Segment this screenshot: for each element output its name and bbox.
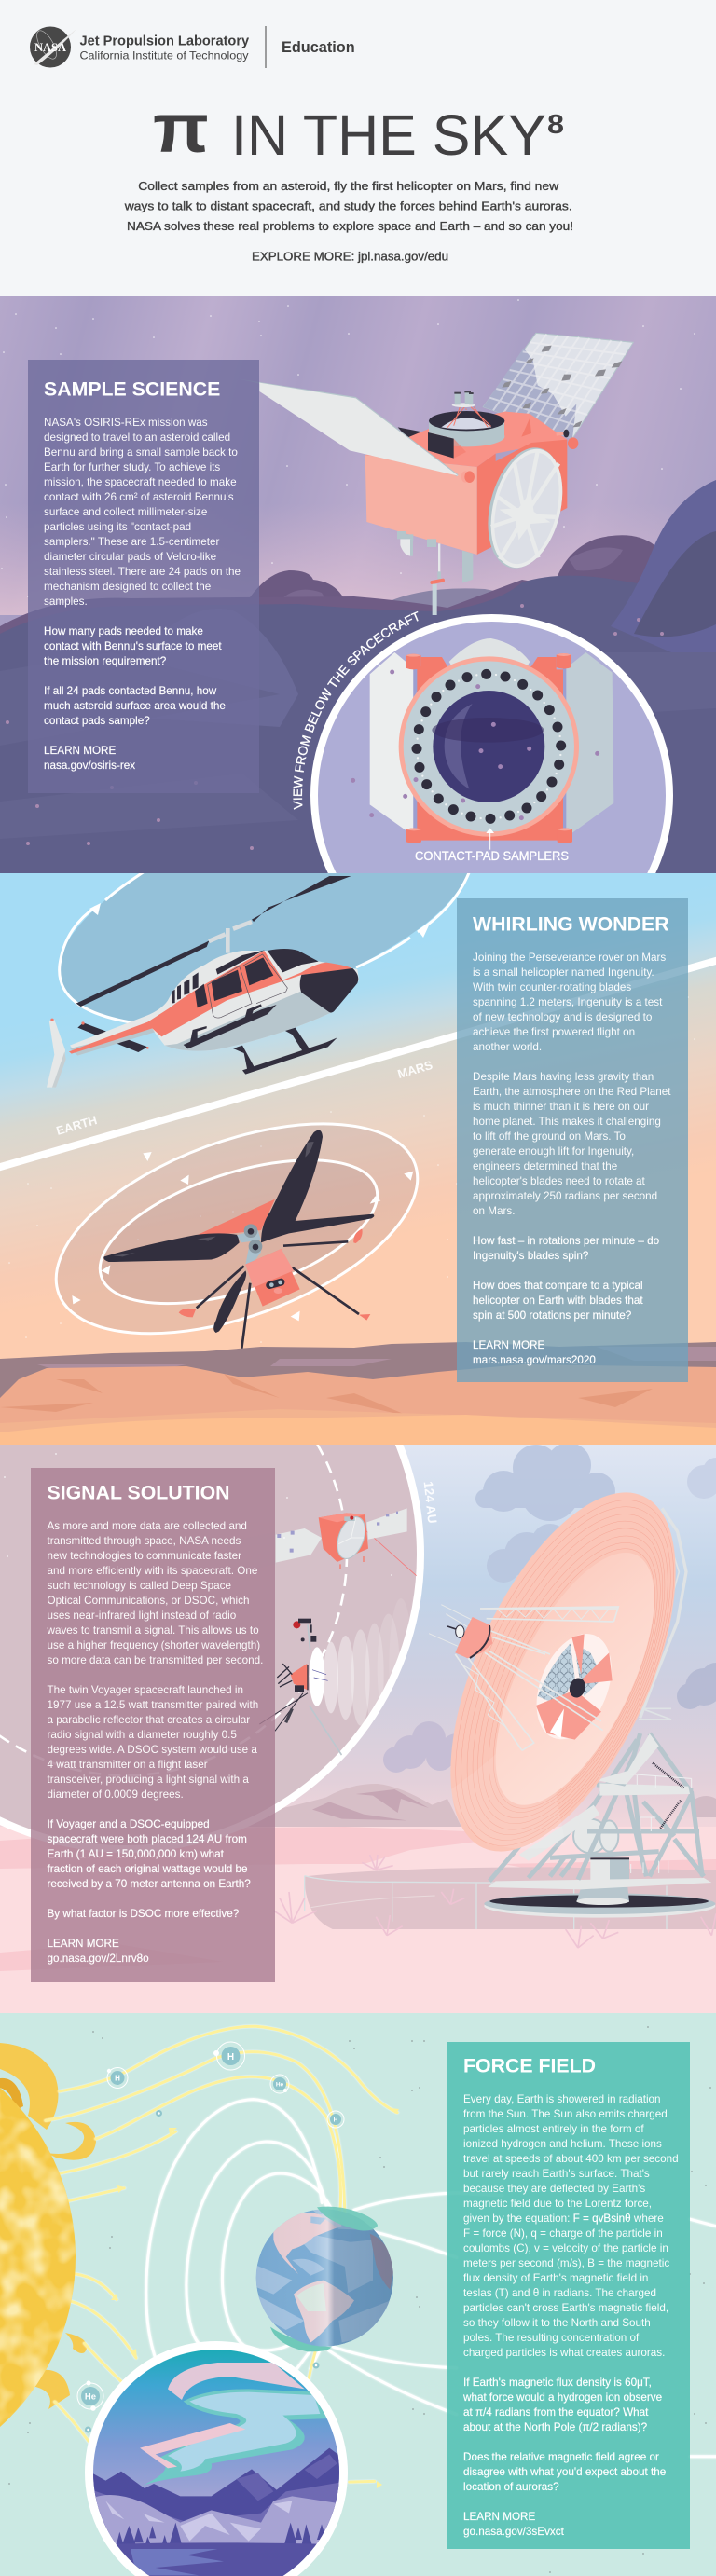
body text: F = force (N), q = charge of the particle in: [463, 2227, 663, 2240]
icon: NASA meatball logo: NASA: [34, 41, 66, 54]
particles: [88, 2114, 316, 2430]
header logos: [30, 26, 355, 68]
outer reflector: [404, 1460, 716, 1884]
shrubs: [273, 1855, 716, 1948]
body text: waves to transmit a signal. This allows us to: [47, 1624, 259, 1637]
body text: transceiver, producing a light signal with a: [47, 1774, 249, 1786]
DSOC spacecraft: [227, 1508, 407, 1575]
north aurora: [317, 2207, 378, 2231]
intro text: NASA solves these real problems to explore space and Earth – and so can you!: [127, 219, 573, 233]
rotor disc: earth helicopter: [60, 870, 470, 1024]
text panel: whirling wonder: [457, 898, 688, 1382]
header background: [0, 0, 716, 296]
far hills: [392, 588, 493, 608]
sun flares: [0, 2043, 96, 2409]
body text: stainless steel. There are 24 pads on the: [44, 566, 241, 578]
body text: samplers." These are 1.5-centimeter: [44, 536, 220, 548]
aperture: [433, 691, 544, 802]
heading: FORCE FIELD: [463, 2054, 596, 2076]
reflector rings: [410, 1469, 716, 1877]
body text: contact with 26 cm² of asteroid Bennu's: [44, 491, 234, 503]
institute name: California Institute of Technology: [80, 48, 249, 62]
aurora view circle: [90, 2345, 345, 2576]
heat shield dish: [488, 447, 563, 569]
deck: [488, 1878, 711, 1889]
questions: go.nasa.gov/3sEvxct: [463, 2526, 565, 2538]
subreflector: [448, 1617, 492, 1658]
label: mars: MARS: [396, 1058, 434, 1081]
hills: [177, 1784, 716, 1829]
label: earth: EARTH: [55, 1113, 99, 1138]
questions: about at the North Pole (π/2 radians)?: [463, 2421, 648, 2433]
body text: radio signal with a diameter roughly 0.5: [47, 1729, 237, 1741]
ion: H small: H: [334, 2117, 338, 2123]
ridge line: [0, 580, 528, 634]
questions: How many pads needed to make: [44, 625, 203, 637]
central feed: [522, 1623, 626, 1750]
body text: poles. The resulting concentration of: [463, 2332, 640, 2344]
body text: generate enough lift for Ingenuity,: [473, 1145, 634, 1158]
body text: from the Sun. The Sun also emits charged: [463, 2108, 668, 2120]
body text: designed to travel to an asteroid called: [44, 432, 230, 444]
lab name: Jet Propulsion Laboratory: [80, 34, 250, 48]
red stripe: [69, 951, 352, 1054]
far mountains: [91, 2448, 342, 2547]
body text: to lift off the ground on Mars. To: [473, 1130, 626, 1143]
body text: use a higher frequency (shorter wavelength): [47, 1639, 260, 1651]
magnetic and solar field lines: [46, 2026, 716, 2482]
body text: new technologies to communicate faster: [47, 1550, 241, 1562]
body text: on Mars.: [473, 1205, 515, 1217]
divider line: [0, 958, 716, 1170]
ions: [77, 2042, 344, 2430]
solar panel: [198, 1199, 275, 1235]
body text: charged particles is what creates auroras.: [463, 2347, 665, 2359]
body text: 4 watt transmitter on a flight laser: [47, 1759, 208, 1771]
dome: [449, 638, 530, 665]
rotor hubs: [237, 1224, 262, 1265]
voyager signal beam: [324, 1584, 432, 1733]
ground: [0, 1827, 716, 2013]
label: contact-pad samplers: CONTACT-PAD SAMPLERS: [415, 849, 569, 863]
questions: nasa.gov/osiris-rex: [44, 760, 135, 772]
questions: go.nasa.gov/2Lnrv8o: [47, 1953, 149, 1965]
questions: spacecraft were both placed 124 AU from: [47, 1833, 247, 1845]
callout: view from below circle: [293, 611, 673, 873]
divider: [265, 26, 267, 68]
questions: contact with Bennu's surface to meet: [44, 640, 222, 652]
clouds: [383, 1443, 716, 1773]
ion: He: He: [276, 2082, 284, 2088]
feed lines: [429, 1605, 473, 1647]
mound left: [250, 570, 343, 597]
stars: [5, 1454, 392, 1575]
stars: [9, 2027, 710, 2572]
aurora bands: [140, 2363, 329, 2486]
education label: Education: [282, 39, 355, 56]
icon: NASA meatball logo: [30, 26, 76, 67]
roof glass: [268, 949, 319, 972]
body text: As more and more data are collected and: [47, 1520, 247, 1532]
body text: and more efficiently with its spacecraft. One: [47, 1565, 257, 1577]
body text: uses near-infrared light instead of radio: [47, 1610, 237, 1622]
questions: Earth (1 AU = 150,000,000 km) what: [47, 1848, 225, 1860]
solar wind lines: [46, 2026, 397, 2482]
ground: mars: [0, 1342, 716, 1445]
body text: Optical Communications, or DSOC, which: [47, 1595, 249, 1607]
fuselage: [70, 951, 359, 1056]
heading: WHIRLING WONDER: [473, 913, 669, 936]
red frame: [417, 657, 563, 841]
wheel: [573, 1819, 608, 1853]
south aurora: [270, 2327, 331, 2351]
mast and blades: [76, 876, 351, 1007]
questions: How does that compare to a typical: [473, 1280, 643, 1292]
outer rotor sweep: [29, 1081, 445, 1376]
body text: Bennu and bring a small sample back to: [44, 446, 238, 459]
ion: H: [107, 2067, 128, 2088]
earth: [255, 2207, 394, 2351]
trees: [116, 2523, 326, 2547]
hinge: [461, 471, 475, 483]
label: 124 AU: 124 AU: [421, 1481, 439, 1524]
struts: [455, 1607, 618, 1750]
voyager spacecraft: [259, 1619, 342, 1755]
questions: Does the relative magnetic field agree or: [463, 2451, 659, 2463]
body text: another world.: [473, 1041, 542, 1053]
night sky: [90, 2346, 345, 2576]
inner rotor sweep: [83, 1131, 394, 1333]
dashed orbit: [0, 1334, 347, 1775]
body text: helicopter's blades need to rotate at: [473, 1175, 646, 1187]
sampler ring: [399, 656, 579, 837]
red laser: [351, 1517, 417, 1576]
pedestal: [590, 1859, 611, 1881]
questions: at π/4 radians from the equator? What: [463, 2406, 649, 2418]
sample return capsule: [429, 391, 504, 446]
text panel: signal solution: [31, 1468, 275, 1982]
skids: [184, 1004, 337, 1075]
body text: The twin Voyager spacecraft launched in: [47, 1684, 243, 1696]
title: [153, 89, 564, 167]
side flaps: [370, 652, 413, 836]
questions: much asteroid surface area would the: [44, 700, 226, 712]
blades: [103, 1130, 374, 1333]
body text: diameter of 0.0009 degrees.: [47, 1788, 184, 1801]
deep space dish: [404, 1460, 716, 1884]
arrow to pads: [489, 833, 490, 850]
questions: received by a 70 meter antenna on Earth?: [47, 1878, 251, 1890]
left translucent hill: [259, 630, 298, 727]
questions: contact pads sample?: [44, 715, 150, 727]
body text: NASA's OSIRIS-REx mission was: [44, 417, 208, 429]
body text: degrees wide. A DSOC system would use a: [47, 1744, 257, 1756]
tail rotor: [77, 1021, 149, 1052]
body text: spanning 1.2 meters, Ingenuity is a test: [473, 996, 663, 1008]
ion: He: [270, 2075, 289, 2093]
fence and shadow: [273, 1855, 716, 1948]
body text: mechanism designed to collect the: [44, 581, 211, 593]
body text: of new technology and is designed to: [473, 1011, 653, 1023]
windows and vents: [172, 957, 273, 1007]
questions: If Earth's magnetic flux density is 60μT,: [463, 2377, 652, 2389]
body text: such technology is called Deep Space: [47, 1580, 231, 1592]
body text: so more data can be transmitted per second.: [47, 1654, 263, 1666]
base: [484, 1894, 715, 1918]
sun: [0, 2022, 84, 2488]
body text: Earth, the atmosphere on the Red Planet: [473, 1086, 671, 1098]
sampling arm: [432, 543, 443, 615]
body text: particles can't cross Earth's magnetic field,: [463, 2302, 668, 2314]
mid mountains: [91, 2482, 342, 2547]
speckles: [353, 672, 598, 818]
arrowheads: [111, 2108, 399, 2488]
magnetic field lines: [146, 2100, 716, 2457]
body text: engineers determined that the: [473, 1160, 617, 1172]
inner reflector: [463, 1530, 686, 1828]
body text: particles using its "contact-pad: [44, 521, 191, 533]
body text: teslas (T) and θ in radians. The charged: [463, 2287, 656, 2299]
globe: [255, 2209, 394, 2347]
right hill: [611, 480, 716, 671]
body text: ionized hydrogen and helium. These ions: [463, 2138, 662, 2150]
helicopter: [47, 876, 359, 1088]
sweep arrows: [72, 1152, 413, 1321]
sampler head: [353, 638, 613, 850]
body text: coulombs (C), v = velocity of the particle in: [463, 2242, 668, 2254]
body side: [477, 440, 567, 555]
panel: sample science scene: [0, 296, 716, 873]
questions: LEARN MORE: [47, 1938, 119, 1950]
body text: Despite Mars having less gravity than: [473, 1071, 654, 1083]
legs: [197, 1241, 359, 1367]
body front: [365, 455, 477, 555]
antenna mount: [484, 1733, 715, 1918]
body text: but rarely reach Earth's surface. That's: [463, 2168, 650, 2180]
ion: H small: [327, 2111, 344, 2128]
heading: SAMPLE SCIENCE: [44, 378, 220, 401]
ion: H large: [213, 2042, 244, 2070]
body text: surface and collect millimeter-size: [44, 506, 207, 518]
body text: travel at speeds of about 400 km per second: [463, 2153, 679, 2165]
body text: With twin counter-rotating blades: [473, 981, 631, 993]
rocks: [7, 606, 662, 848]
frame: [489, 1733, 704, 1881]
title: IN THE SKY: [231, 103, 546, 167]
questions: what force would a hydrogen ion observe: [462, 2391, 662, 2404]
white flap: [259, 382, 459, 477]
backing rim: [640, 1508, 686, 1718]
belly: [70, 991, 331, 1056]
near mountains: [93, 2495, 342, 2547]
body text: a parabolic reflector that creates a circular: [47, 1714, 250, 1726]
questions: spin at 500 rotations per minute?: [473, 1309, 632, 1322]
ion: He large: [77, 2380, 103, 2411]
questions: location of auroras?: [463, 2481, 559, 2493]
body text: Earth for further study. To achieve its: [44, 461, 220, 473]
panel: signal solution scene: [0, 1260, 716, 2013]
questions: By what factor is DSOC more effective?: [47, 1908, 240, 1920]
title: π: [153, 89, 209, 167]
text panel: sample science: [28, 360, 259, 793]
stars: [9, 997, 695, 1351]
body text: transmitted through space, NASA needs: [47, 1535, 241, 1547]
intro text: Collect samples from an asteroid, fly the first helicopter on Mars, find new: [138, 179, 559, 193]
tail fin: [47, 1019, 66, 1088]
title: 8: [547, 110, 564, 140]
questions: If all 24 pads contacted Bennu, how: [44, 685, 217, 697]
questions: fraction of each original wattage would be: [47, 1863, 248, 1875]
body text: so they follow it to the North and South: [463, 2317, 651, 2329]
deep space circle: [0, 1260, 432, 1849]
body text: approximately 250 radians per second: [473, 1190, 657, 1202]
body text: flux density of Earth's magnetic field in: [463, 2272, 648, 2284]
questions: helicopter on Earth with blades that: [473, 1295, 643, 1307]
panel: whirling wonder scene: [0, 870, 716, 1445]
intro text: ways to talk to distant spacecraft, and study the forces behind Earth's auroras.: [124, 199, 572, 212]
questions: LEARN MORE: [473, 1339, 544, 1351]
ground: [0, 576, 716, 873]
frame corners: [406, 653, 572, 843]
lake: [105, 2542, 333, 2576]
fuselage box: [245, 1249, 300, 1307]
ingenuity helicopter: [29, 1081, 445, 1377]
thrusters: [397, 531, 473, 583]
questions: LEARN MORE: [463, 2511, 535, 2523]
questions: the mission requirement?: [44, 655, 167, 667]
nose: [300, 968, 358, 1013]
body text: achieve the first powered flight on: [473, 1026, 635, 1038]
questions: mars.nasa.gov/mars2020: [473, 1354, 596, 1366]
body text: home planet. This makes it challenging: [473, 1116, 661, 1128]
questions: disagree with what you'd expect about the: [463, 2466, 666, 2478]
contact pads: [417, 674, 561, 818]
feet: [179, 1228, 370, 1377]
solar panel: [483, 333, 633, 439]
heading: SIGNAL SOLUTION: [47, 1482, 230, 1504]
text panel: force field: [448, 2042, 690, 2549]
body text: is a small helicopter named Ingenuity.: [473, 966, 654, 979]
body text: magnetic field due to the Lorentz force,: [463, 2198, 652, 2210]
ion: H large: H: [227, 2052, 234, 2062]
questions: How fast – in rotations per minute – do: [473, 1235, 660, 1247]
ion: H: H: [115, 2075, 120, 2082]
stairs: [653, 1763, 683, 1829]
body text: given by the equation: F = qvBsinθ where: [463, 2213, 664, 2225]
questions: Ingenuity's blades spin?: [473, 1250, 589, 1262]
body text: because they are deflected by Earth's: [463, 2183, 645, 2195]
body text: Joining the Perseverance rover on Mars: [473, 952, 666, 964]
body text: mission, the spacecraft needed to make: [44, 476, 237, 488]
ion: He large: He: [85, 2391, 96, 2403]
panel: force field scene: [0, 2013, 716, 2576]
spacecraft: OSIRIS-REx: [240, 333, 633, 615]
body text: 1977 use a 12.5 watt transmitter paired with: [47, 1699, 258, 1711]
explore more link: EXPLORE MORE: jpl.nasa.gov/edu: [252, 250, 448, 263]
black panels: [397, 427, 421, 437]
railing: [627, 1774, 692, 1873]
body text: samples.: [44, 596, 88, 608]
body top: [365, 412, 567, 467]
mound right: [558, 535, 654, 583]
curved label: VIEW FROM BELOW THE SPACECRAFT: [293, 611, 419, 810]
body text: particles almost entirely in the form of: [463, 2123, 644, 2135]
body text: diameter circular pads of Velcro-like: [44, 551, 216, 563]
questions: If Voyager and a DSOC-equipped: [47, 1818, 210, 1830]
body text: Every day, Earth is showered in radiation: [463, 2093, 661, 2105]
body text: meters per second (m/s), B = the magnetic: [463, 2257, 669, 2269]
stars: [2, 300, 695, 596]
body text: is much thinner than it is here on our: [473, 1101, 649, 1113]
door outlines: [208, 954, 287, 1018]
questions: LEARN MORE: [44, 745, 116, 757]
